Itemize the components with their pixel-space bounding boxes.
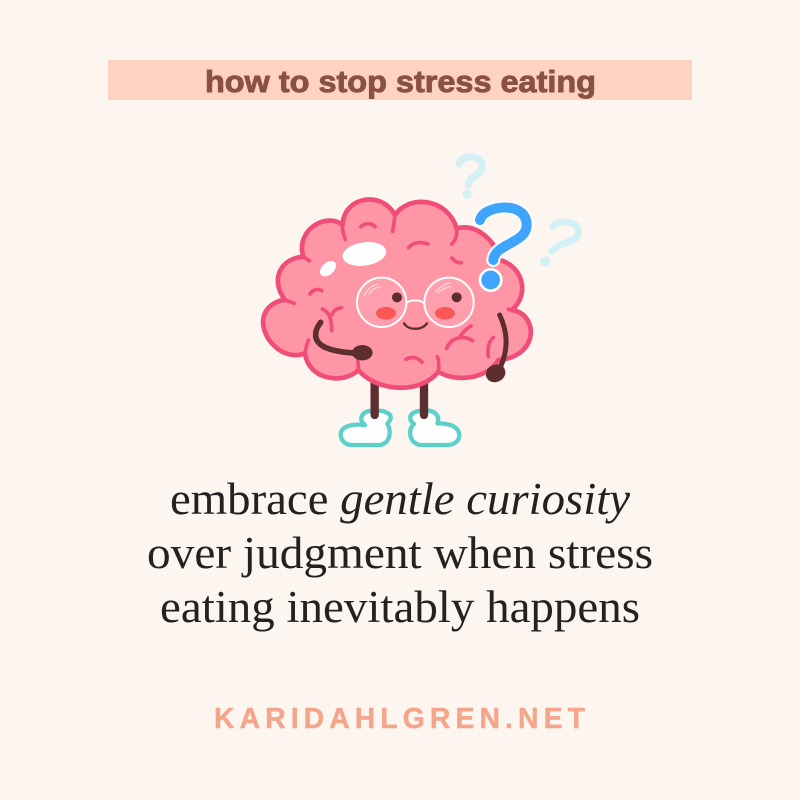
icon: pale question mark top — [459, 157, 482, 199]
cheeks — [376, 307, 455, 320]
main message — [147, 473, 653, 632]
icon: pale question mark right — [540, 222, 578, 267]
glasses — [357, 278, 474, 327]
shoes — [341, 410, 459, 445]
title banner: how to stop stress eating — [205, 64, 596, 99]
line 2: over judgment when stress — [147, 527, 653, 578]
smile — [404, 323, 427, 329]
illustration: confused brain character — [263, 157, 578, 445]
line 3: eating inevitably happens — [160, 581, 640, 632]
line 1: embrace gentle curiosity — [170, 473, 631, 524]
eyes — [392, 292, 462, 302]
brain folds — [285, 215, 512, 372]
website footer: KARIDAHLGREN.NET — [214, 703, 590, 735]
title banner — [108, 60, 692, 100]
icon: blue question mark — [480, 207, 527, 291]
highlights — [317, 239, 388, 279]
right arm — [483, 315, 508, 385]
glasses glints — [364, 283, 450, 296]
legs — [375, 380, 424, 415]
left arm — [316, 322, 373, 360]
brain body — [263, 200, 531, 388]
